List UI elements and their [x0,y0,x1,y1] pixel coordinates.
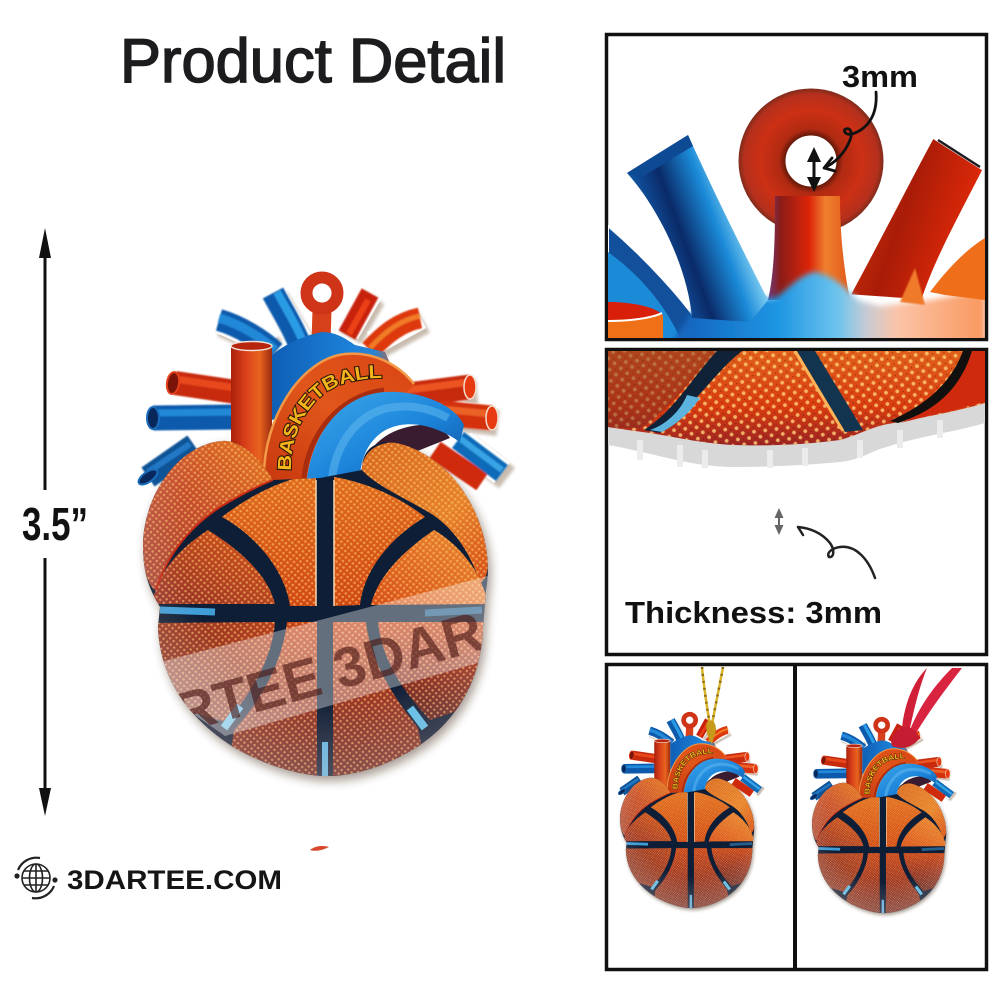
ball [608,351,985,445]
base band [670,272,985,345]
red flare [900,268,925,305]
icon: globe [15,858,57,898]
ornament with gold cord: BASKETBALL [672,748,714,790]
ring [762,112,860,210]
gray edge [608,400,985,467]
panel: thickness detail [606,350,986,654]
ornament with red ribbon: BASKETBALL [864,752,906,794]
curly arrow [824,92,876,171]
red tube [850,138,983,300]
small tube [608,302,663,338]
neck [768,196,850,300]
left blue tube [608,224,694,337]
ornament with red ribbon [810,668,962,918]
small double arrow [774,508,784,535]
seams [644,351,742,433]
small red mark [310,846,329,851]
thickness label: Thickness: 3mm [625,595,882,630]
double arrow [807,147,821,192]
logo [15,858,282,898]
watermark band: ARTEE 3DAR [128,599,490,756]
ornament with gold cord [618,666,765,912]
brand name: 3DARTEE.COM [67,865,282,895]
arch lettering: BASKETBALL [276,364,383,471]
panel: hanging hole detail [606,34,986,345]
curly pointer [798,527,875,578]
hole size label: 3mm [842,59,918,94]
height label: 3.5” [22,498,88,550]
height dimension arrow [39,228,51,816]
main ornament: basketball heart [138,272,516,788]
right orange tube [930,238,985,300]
panel: hanging options [604,662,988,972]
blue tube [627,135,768,322]
watermark band [164,576,488,736]
title: Product Detail [120,27,506,96]
